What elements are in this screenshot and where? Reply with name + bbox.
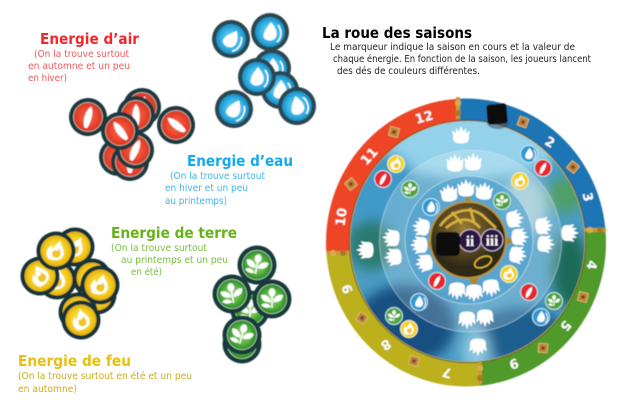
wheel centre: landscape bbox=[348, 120, 586, 364]
heading: Energie d'air: Energie d’air bbox=[40, 30, 140, 48]
month numbers: 9 bbox=[340, 282, 357, 295]
black cube on hub bbox=[436, 232, 460, 256]
text block: wheel description: Le marqueur indique la saison en cours et la valeur de bbox=[330, 42, 575, 53]
text block: earth energy description: en été) bbox=[131, 266, 162, 278]
text block: wheel description: chaque énergie. En fonction de la saison, les joueurs lancent bbox=[333, 53, 591, 65]
token pile: red air tokens bbox=[65, 85, 202, 181]
brass studs at season boundaries bbox=[327, 97, 606, 384]
wheel ring: middle bbox=[380, 150, 562, 332]
heading: Energie de terre: Energie de terre bbox=[111, 224, 237, 242]
hub with compass points bbox=[423, 194, 516, 290]
month numbers: 10 bbox=[333, 207, 351, 227]
month numbers: 7 bbox=[441, 363, 454, 380]
month numbers: 5 bbox=[556, 317, 574, 334]
text block: earth energy description: au printemps et un peu bbox=[121, 255, 228, 266]
black season marker cube bbox=[486, 103, 509, 129]
text block: air energy description bbox=[28, 49, 130, 84]
text block: air energy description: (On la trouve surtout bbox=[34, 49, 129, 60]
text block: water energy description: en hiver et un peu bbox=[165, 183, 248, 194]
title: La roue des saisons: La roue des saisons bbox=[322, 24, 472, 42]
white paws: value markers bbox=[356, 126, 578, 356]
month numbers: 11 bbox=[358, 145, 382, 169]
month numbers: 3 bbox=[579, 191, 595, 203]
text block: fire energy description: (On la trouve surtout en été et un peu bbox=[18, 370, 192, 382]
copper diamonds bbox=[345, 116, 589, 367]
month numbers: 4 bbox=[583, 259, 599, 271]
token pile: blue water tokens bbox=[205, 13, 320, 134]
text block: fire energy description bbox=[18, 370, 192, 395]
text block: air energy description: en hiver) bbox=[28, 73, 67, 84]
text block: wheel description: des dés de couleurs différentes. bbox=[337, 65, 480, 77]
text block: water energy description bbox=[165, 171, 265, 207]
text block: earth energy description bbox=[111, 243, 228, 278]
season wheel bbox=[325, 96, 607, 388]
text block: wheel description bbox=[330, 42, 591, 77]
round marker: ii: ii bbox=[466, 234, 474, 250]
month numbers bbox=[333, 109, 599, 380]
round marker: ii bbox=[459, 230, 481, 252]
wheel outer band: four coloured seasons bbox=[325, 98, 607, 388]
text block: water energy description: (On la trouve surtout bbox=[170, 171, 265, 182]
round marker: iii bbox=[481, 229, 503, 251]
token pile: green earth tokens bbox=[209, 242, 292, 364]
heading: Energie de feu: Energie de feu bbox=[18, 352, 131, 370]
text block: earth energy description: (On la trouve surtout bbox=[111, 243, 207, 254]
month numbers: 6 bbox=[508, 357, 521, 374]
heading: Energie d'eau: Energie d’eau bbox=[187, 152, 293, 170]
month numbers: 12 bbox=[414, 109, 435, 128]
text block: air energy description: en automne et un peu bbox=[28, 61, 130, 72]
wheel ring: inner bbox=[405, 176, 533, 304]
text block: fire energy description: en automne) bbox=[18, 384, 77, 395]
energy tokens on wheel bbox=[374, 146, 562, 338]
round marker: iii: iii bbox=[486, 234, 498, 250]
month numbers: 8 bbox=[378, 335, 393, 353]
month numbers: 2 bbox=[542, 134, 557, 152]
text block: water energy description: au printemps) bbox=[165, 196, 227, 207]
token pile: yellow fire tokens bbox=[13, 222, 121, 345]
